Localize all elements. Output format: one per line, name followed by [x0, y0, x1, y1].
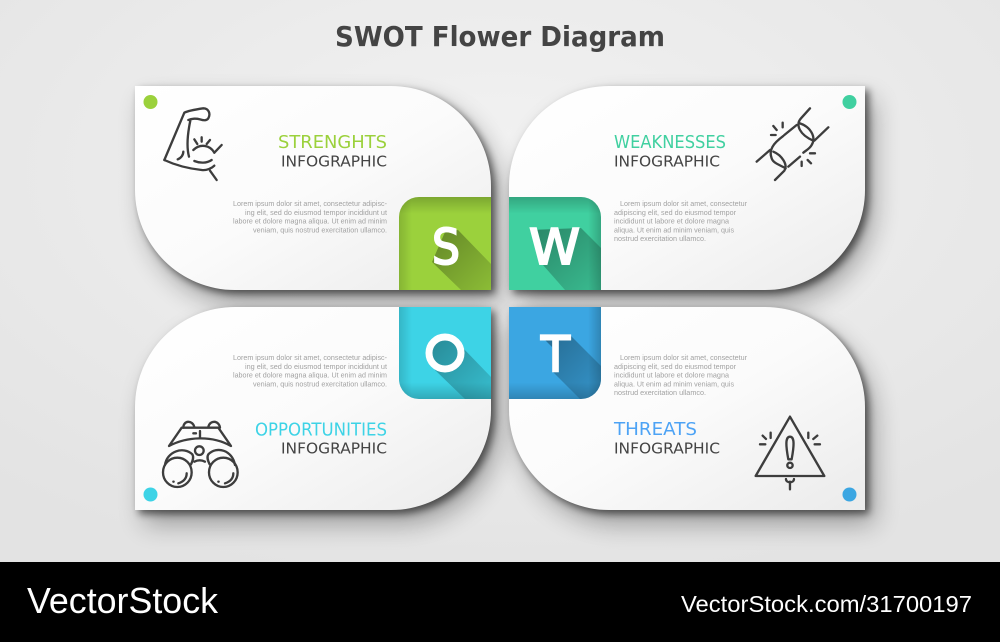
- badge: O: [399, 307, 491, 399]
- footer bar: [0, 562, 1000, 642]
- badge: T: T: [540, 326, 571, 383]
- heading: strengths: STRENGHTS: [278, 133, 387, 153]
- icon: broken chain: [757, 108, 828, 180]
- panel: strengths: [135, 86, 500, 304]
- body text: threats: Lorem ipsum dolor sit amet, consectetur: [620, 353, 747, 362]
- subheading: weaknesses: INFOGRAPHIC: [614, 152, 720, 170]
- dot: opportunities: [144, 488, 158, 502]
- body text: opportunities: [233, 353, 388, 388]
- body text: threats: [614, 353, 747, 397]
- body text: opportunities: ing elit, sed do eiusmod tempor incididunt ut: [245, 362, 388, 371]
- body text: weaknesses: incididunt ut labore et dolore magna: [614, 216, 730, 226]
- panel: threats: [509, 307, 874, 524]
- panel: opportunities: [135, 307, 500, 524]
- body text: strengths: veniam, quis nostrud exercitation ullamco.: [253, 225, 387, 234]
- subheading: strengths: INFOGRAPHIC: [281, 152, 387, 170]
- subheading: threats: INFOGRAPHIC: [614, 440, 720, 458]
- body text: strengths: [233, 199, 388, 234]
- body text: strengths: Lorem ipsum dolor sit amet, consectetur adipisc-: [233, 199, 387, 208]
- heading: threats: THREATS: [613, 420, 697, 440]
- body text: threats: incididunt ut labore et dolore magna: [614, 370, 730, 380]
- icon: flexed arm: [164, 108, 222, 180]
- body text: strengths: ing elit, sed do eiusmod tempor incididunt ut: [245, 208, 388, 217]
- body text: weaknesses: nostrud exercitation ullamco.: [614, 234, 706, 243]
- body text: threats: nostrud exercitation ullamco.: [614, 388, 706, 397]
- dot: threats: [842, 488, 856, 502]
- title: SWOT Flower Diagram: [335, 20, 665, 53]
- body text: opportunities: labore et dolore magna aliqua. Ut enim ad minim: [233, 370, 387, 380]
- body text: threats: adipiscing elit, sed do eiusmod tempor: [614, 362, 736, 371]
- badge: T: [509, 307, 601, 399]
- dot: strengths: [144, 95, 158, 109]
- footer logo: VectorStock: [27, 580, 219, 621]
- badge: S: S: [432, 219, 460, 276]
- panel: weaknesses: [509, 86, 874, 304]
- subheading: opportunities: INFOGRAPHIC: [281, 440, 387, 458]
- body text: strengths: labore et dolore magna aliqua. Ut enim ad minim: [233, 216, 387, 226]
- heading: opportunities: OPPORTUNITIES: [255, 420, 387, 440]
- body text: weaknesses: aliqua. Ut enim ad minim veniam, quis: [614, 225, 734, 234]
- icon: binoculars: [163, 422, 238, 487]
- body text: weaknesses: [614, 199, 747, 243]
- badge: W: W: [529, 219, 580, 276]
- body text: opportunities: veniam, quis nostrud exercitation ullamco.: [253, 379, 387, 388]
- badge: S: [399, 197, 491, 290]
- heading: weaknesses: WEAKNESSES: [614, 133, 726, 153]
- icon: warning triangle: [756, 417, 824, 489]
- dot: weaknesses: [842, 95, 856, 109]
- body text: threats: aliqua. Ut enim ad minim veniam, quis: [614, 379, 734, 388]
- footer url: VectorStock.com/31700197: [681, 591, 972, 617]
- body text: weaknesses: Lorem ipsum dolor sit amet, consectetur: [620, 199, 747, 208]
- body text: weaknesses: adipiscing elit, sed do eiusmod tempor: [614, 208, 736, 217]
- badge: W: [509, 197, 601, 290]
- body text: opportunities: Lorem ipsum dolor sit amet, consectetur adipisc-: [233, 353, 387, 362]
